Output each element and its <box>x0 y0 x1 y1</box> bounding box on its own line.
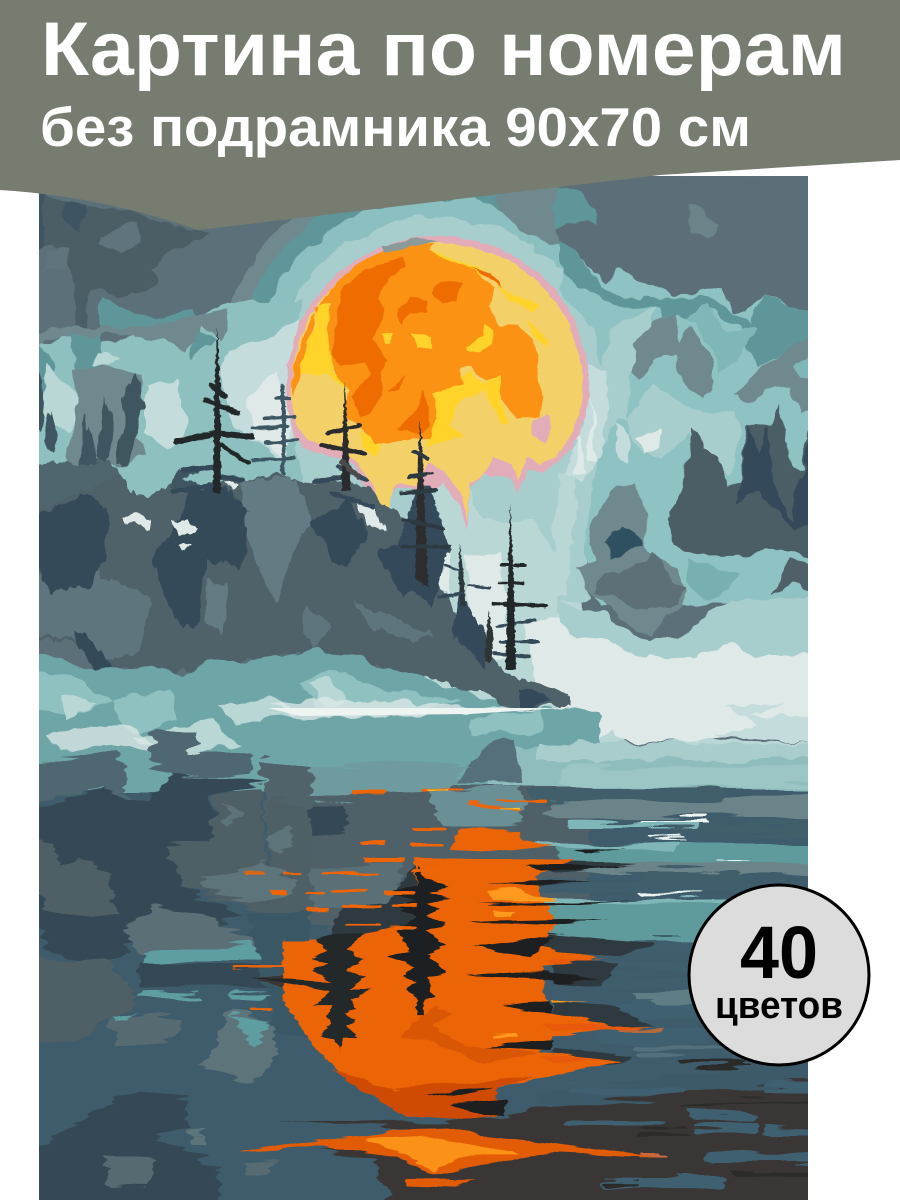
fir tree C <box>397 420 449 607</box>
reflection bottom streak <box>237 1128 663 1175</box>
reflection upper band <box>450 828 553 852</box>
left water shapes <box>33 730 311 1200</box>
reflection flares <box>540 959 653 1063</box>
badge number: 40 <box>740 911 818 994</box>
title: Картина по номерам <box>41 7 846 92</box>
moon dark orange blotches <box>332 257 503 433</box>
moon reflection <box>233 790 663 1187</box>
reflection dark ripples <box>427 848 637 1117</box>
right sky clouds and forest <box>558 176 815 776</box>
reflection main disc <box>283 857 623 1118</box>
reflection dark backing <box>330 860 657 1067</box>
lower brown water <box>278 1078 808 1200</box>
fir tree G <box>253 387 297 473</box>
centre water <box>290 785 590 930</box>
reflection bottom dash <box>405 1179 477 1187</box>
moon <box>287 237 589 530</box>
painting: moonlit lake <box>39 176 808 1200</box>
moon yellow inner spots <box>382 323 493 352</box>
moon pink mark <box>532 415 552 443</box>
reflection deep orange <box>333 1070 533 1118</box>
sky background <box>39 176 808 747</box>
badge label: цветов <box>715 985 843 1027</box>
subtitle: без подрамника 90х70 см <box>40 96 751 158</box>
moon pale yellow disc <box>292 243 583 520</box>
fir tree F <box>485 610 494 663</box>
shoreline tip <box>470 680 570 708</box>
moon halo <box>287 237 589 530</box>
badge: 40 colours <box>689 885 869 1065</box>
reflection highlights <box>487 888 560 1037</box>
mist band <box>39 646 808 793</box>
fir tree B <box>315 382 373 507</box>
fir tree A <box>173 327 252 493</box>
fir tree E <box>494 503 545 670</box>
right water streaks <box>535 777 829 1050</box>
distant right forest <box>668 406 815 555</box>
reflection small dashes <box>233 790 545 1008</box>
fir tree D <box>432 543 490 633</box>
moon bright yellow patches <box>298 250 548 457</box>
lake water <box>10 730 853 1200</box>
foreground fir trees <box>173 327 545 670</box>
pale reflection below shore <box>460 738 525 785</box>
reflection dark fir column <box>387 867 450 1017</box>
forest mass <box>33 360 572 708</box>
header banner <box>0 0 900 230</box>
moon orange mass <box>292 243 543 445</box>
